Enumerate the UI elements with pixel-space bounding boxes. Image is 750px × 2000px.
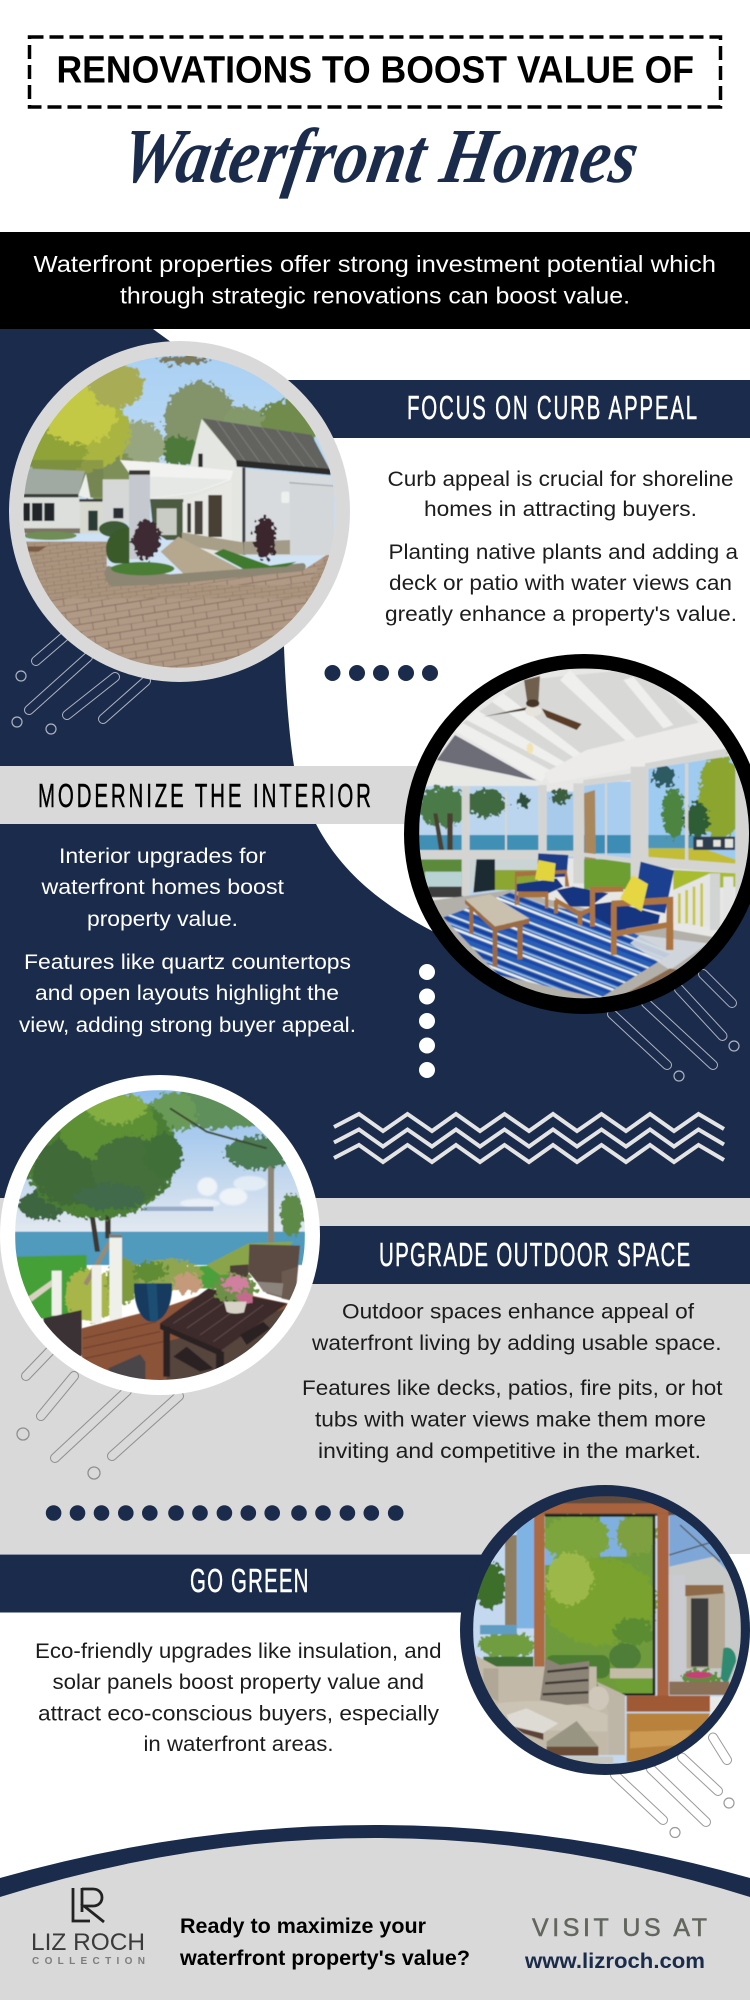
- logo: Liz Roch Collection: [31, 1888, 145, 1967]
- paragraph: upgrade outdoor space: tubs with water views make them more: [315, 1408, 706, 1432]
- script title: Waterfront Homes: [115, 114, 645, 200]
- table: [160, 1288, 287, 1350]
- intro banner: through strategic renovations can boost value.: [120, 282, 630, 308]
- paragraph: upgrade outdoor space: Outdoor spaces enhance appeal of: [342, 1300, 694, 1324]
- band: go green: [0, 1554, 490, 1612]
- window views: [417, 753, 742, 897]
- decorative capsules: section 1: [12, 636, 146, 734]
- paragraph: modernize the interior: view, adding strong buyer appeal.: [19, 1014, 356, 1037]
- band: go green: GO GREEN: [190, 1562, 308, 1599]
- driveway: [49, 542, 327, 668]
- band: modernize the interior: MODERNIZE THE INTERIOR: [38, 777, 371, 814]
- visit us: [524, 1914, 707, 1973]
- background: grey section: [0, 1198, 750, 1554]
- ceiling: [464, 672, 698, 770]
- decorative capsules: section 3: [17, 1351, 179, 1479]
- band: upgrade outdoor space: [300, 1226, 750, 1284]
- intro banner: Waterfront properties offer strong investment potential which: [34, 251, 716, 277]
- dots: section 3: [46, 1505, 404, 1521]
- paragraph: modernize the interior: Interior upgrades for: [59, 845, 266, 868]
- left view: [517, 1518, 535, 1628]
- photo: house with paved driveway: [9, 341, 350, 682]
- paragraph: modernize the interior: [19, 845, 356, 1037]
- decorative capsules: section 2: [612, 974, 739, 1081]
- paragraph: upgrade outdoor space: waterfront living by adding usable space.: [311, 1332, 722, 1355]
- background: navy shape upper left: [0, 329, 294, 766]
- background: navy section: [0, 824, 750, 1198]
- paragraph: go green: attract eco-conscious buyers, especially: [38, 1702, 440, 1726]
- call to action: waterfront property's value?: [179, 1947, 470, 1970]
- call to action: Ready to maximize your: [180, 1915, 426, 1938]
- paragraph: modernize the interior: and open layouts highlight the: [35, 982, 339, 1005]
- paragraph: upgrade outdoor space: inviting and competitive in the market.: [318, 1440, 701, 1463]
- paragraph: curb appeal: [385, 468, 738, 626]
- logo: Liz Roch Collection: LIZ ROCH: [31, 1929, 145, 1956]
- planter and plants: [161, 537, 240, 574]
- floor: [627, 1713, 710, 1762]
- photo: living room with garden view: [460, 1485, 750, 1775]
- sofa: [475, 1655, 608, 1755]
- dots: section 1: [324, 665, 438, 681]
- ceiling fan: [524, 676, 540, 703]
- visit us: VISIT US AT: [532, 1914, 707, 1942]
- dots: vertical white: [419, 964, 435, 1078]
- floor and rug: [423, 890, 730, 1000]
- paragraph: curb appeal: deck or patio with water views can: [389, 572, 732, 595]
- foliage: trees behind house: [20, 356, 323, 502]
- paragraph: curb appeal: greatly enhance a property's value.: [385, 603, 737, 626]
- photo: sunroom with lake view: [404, 654, 750, 1014]
- visit us: www.lizroch.com: [524, 1949, 705, 1973]
- shrubs and flowers: [65, 1258, 202, 1322]
- paragraph: curb appeal: homes in attracting buyers.: [424, 498, 697, 521]
- ottoman: [554, 887, 608, 925]
- armchair right: [588, 862, 674, 955]
- deck: [80, 1295, 288, 1380]
- column: [129, 471, 150, 559]
- band: upgrade outdoor space: UPGRADE OUTDOOR SPACE: [379, 1236, 690, 1273]
- wicker chair: [248, 1244, 300, 1302]
- wood frame: [535, 1503, 668, 1513]
- wicker chair foreground: [42, 1310, 82, 1356]
- paragraph: modernize the interior: Features like quartz countertops: [24, 951, 351, 974]
- railing: [673, 873, 710, 927]
- railing posts: [83, 1240, 110, 1286]
- paragraph: curb appeal: Curb appeal is crucial for shoreline: [388, 468, 734, 491]
- logo: Liz Roch Collection: COLLECTION: [32, 1956, 145, 1967]
- paragraph: go green: [35, 1640, 442, 1756]
- flower pot: [213, 1274, 257, 1304]
- paragraph: curb appeal: Planting native plants and adding a: [388, 541, 738, 564]
- armchair left: [515, 853, 569, 908]
- paragraph: go green: Eco-friendly upgrades like insulation, and: [35, 1640, 442, 1663]
- coffee table: [465, 894, 529, 967]
- zigzag lines: [334, 1114, 724, 1162]
- call to action: [179, 1915, 470, 1970]
- decorative capsules: section 4: [615, 1738, 734, 1838]
- pillow: [540, 1658, 589, 1705]
- title box: RENOVATIONS TO BOOST VALUE OF: [56, 50, 694, 92]
- table and books: [546, 1721, 598, 1748]
- paragraph: modernize the interior: waterfront homes boost: [40, 876, 284, 899]
- band: modernize the interior: [0, 766, 430, 824]
- pergola: [120, 460, 233, 499]
- main house: [150, 419, 244, 556]
- right view: [668, 1514, 728, 1572]
- paragraph: upgrade outdoor space: Features like decks, patios, fire pits, or hot: [302, 1377, 723, 1400]
- planter: [134, 1283, 172, 1322]
- paragraph: modernize the interior: property value.: [87, 908, 238, 931]
- window frames: [420, 748, 749, 898]
- paragraph: upgrade outdoor space: [302, 1300, 723, 1463]
- paragraph: go green: in waterfront areas.: [144, 1733, 334, 1756]
- photo: deck overlooking the lake: [0, 1075, 320, 1395]
- footer arc: [0, 1825, 750, 2000]
- door glass: [545, 1515, 655, 1695]
- title box: [30, 37, 720, 107]
- band: focus on curb appeal: FOCUS ON CURB APPEAL: [407, 389, 697, 426]
- clouds: [180, 1176, 267, 1208]
- icon: LR monogram: [73, 1888, 104, 1922]
- left house: [24, 468, 85, 496]
- band: focus on curb appeal: [280, 380, 750, 438]
- trees: [90, 1214, 112, 1252]
- intro banner: [0, 232, 750, 329]
- paragraph: go green: solar panels boost property value and: [52, 1671, 424, 1694]
